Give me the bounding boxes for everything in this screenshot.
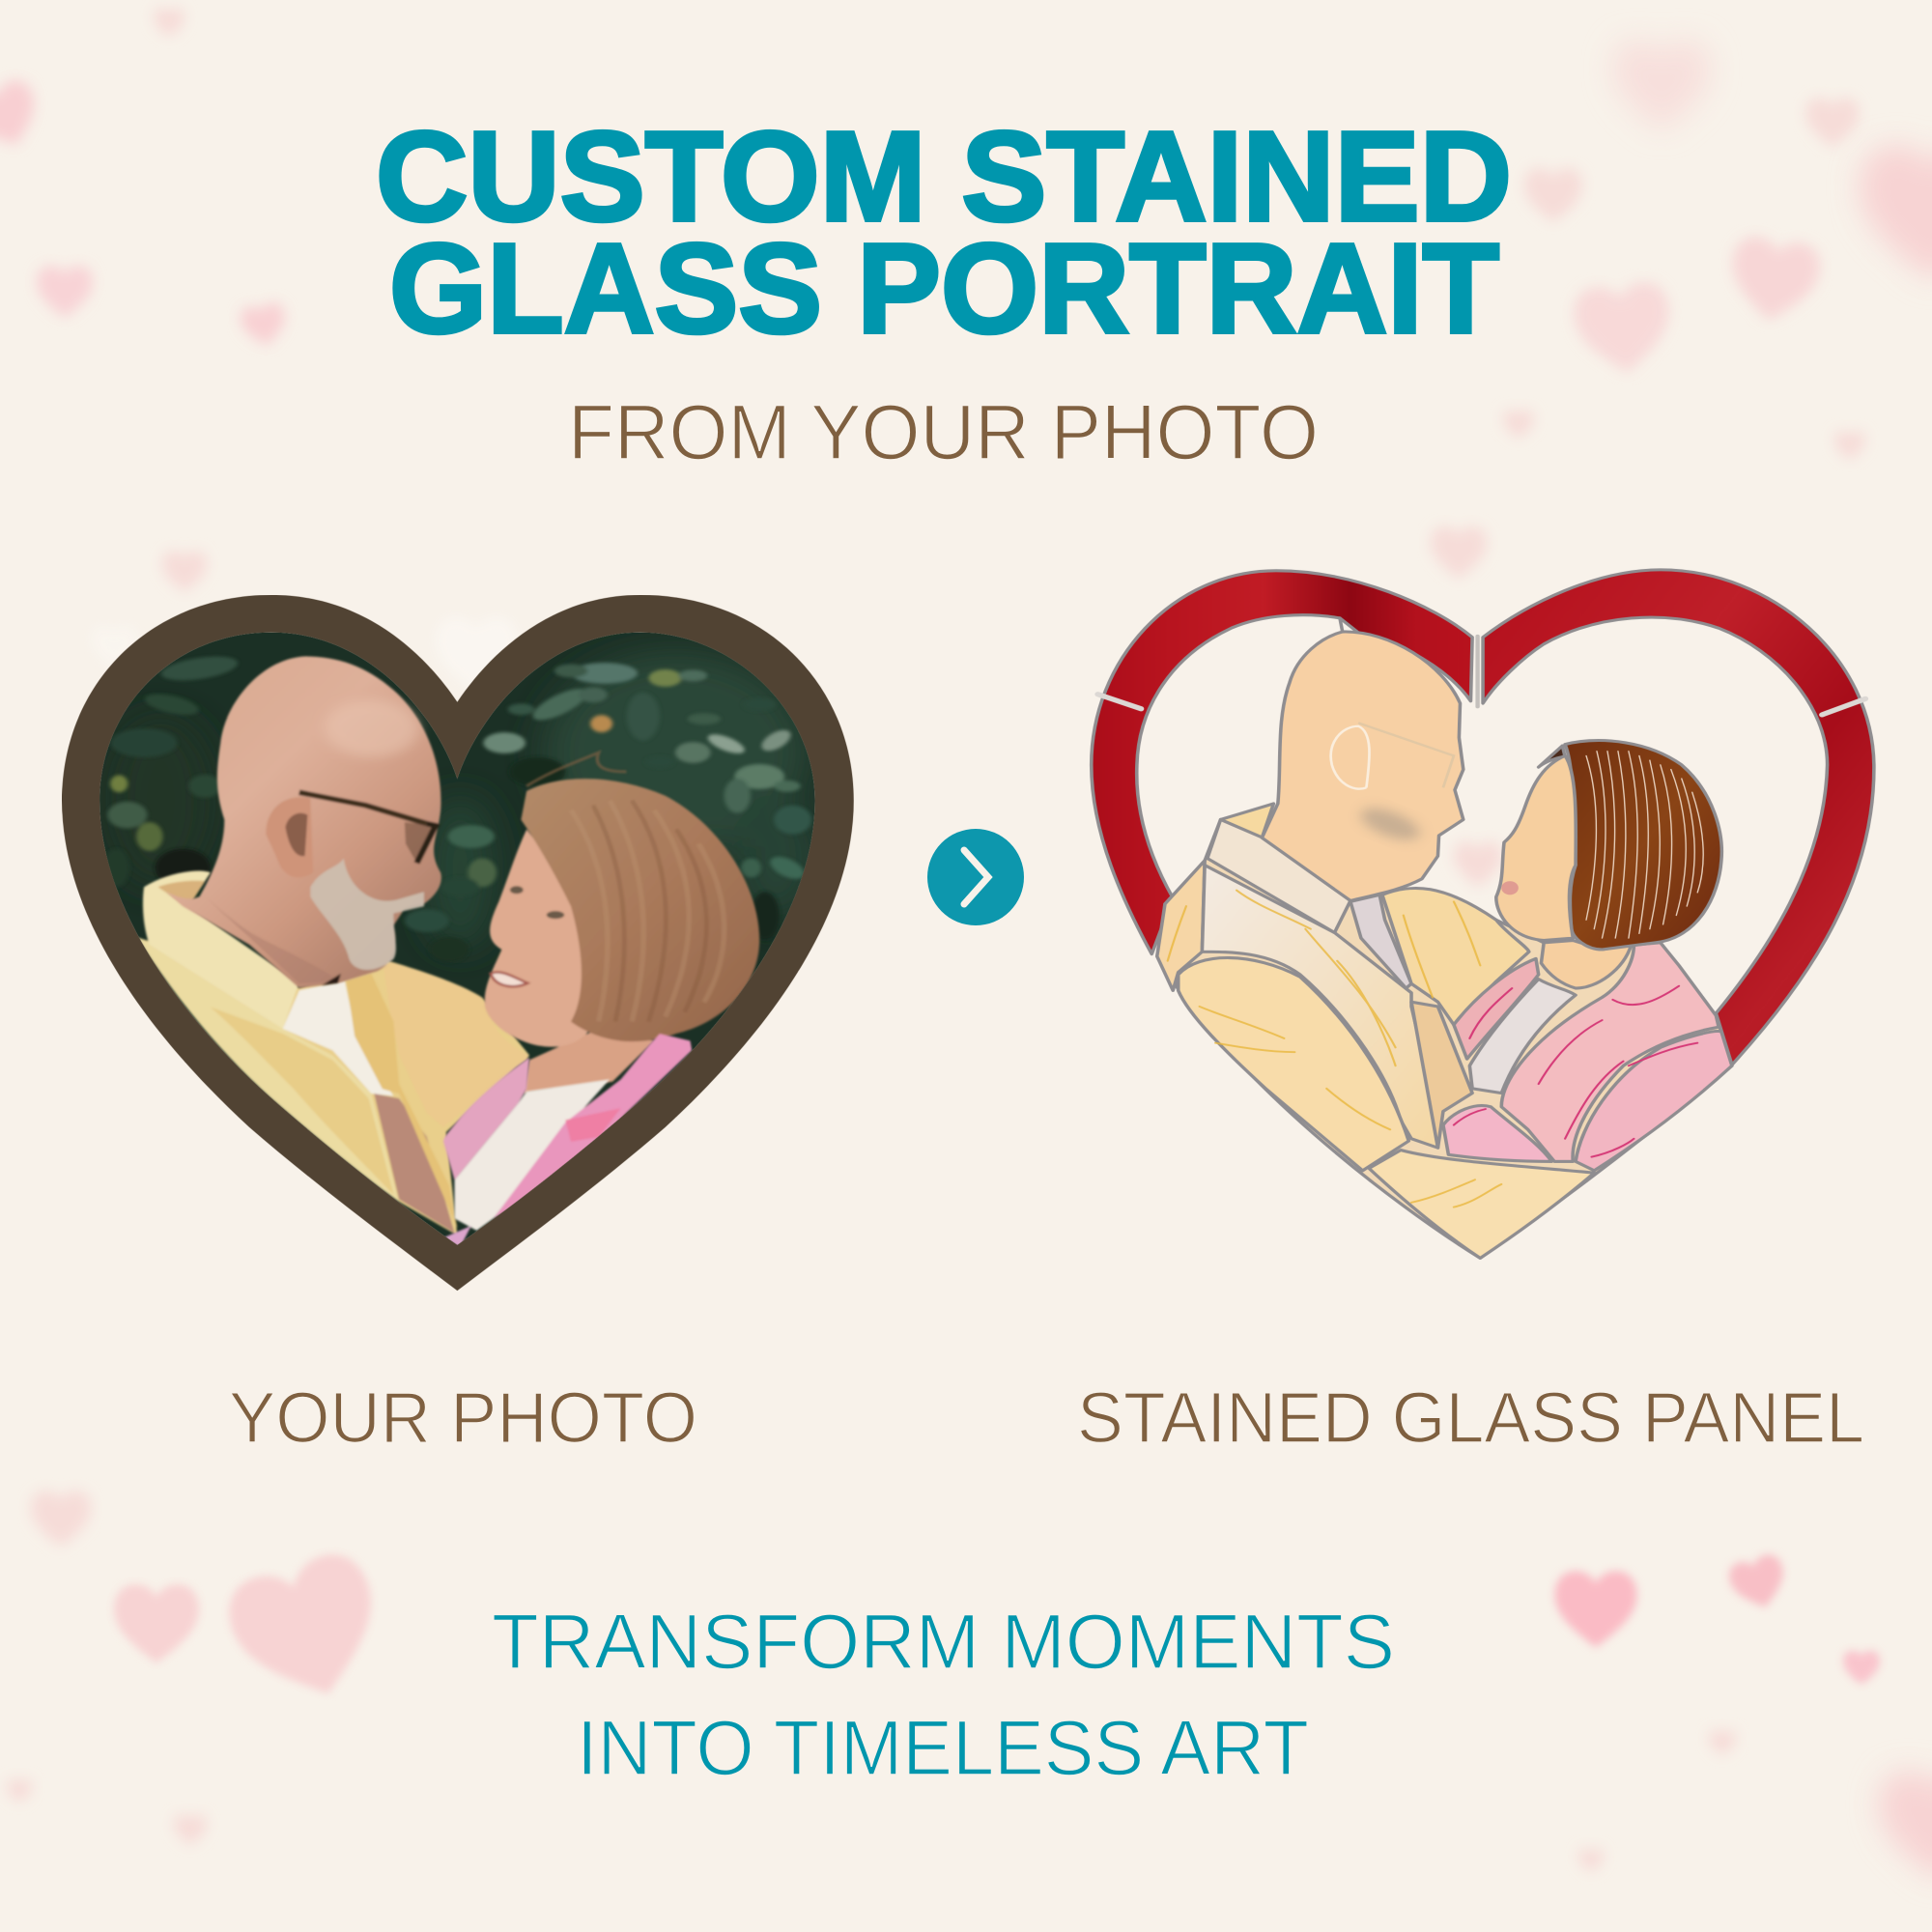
photo foliage background xyxy=(94,628,820,1252)
man glass: head xyxy=(1262,618,1463,900)
tagline xyxy=(492,1599,1395,1792)
label: your photo: YOUR PHOTO xyxy=(229,1378,697,1458)
man: shirt body xyxy=(137,870,529,1236)
red glass ring xyxy=(1092,570,1874,1065)
man glass: shoulders and shirt xyxy=(1157,804,1594,1258)
yellow glass streaks xyxy=(1168,891,1501,1208)
brown heart frame xyxy=(62,595,854,1291)
woman: hair and face xyxy=(485,753,759,1094)
woman glass xyxy=(1443,741,1732,1171)
label: stained glass panel: STAINED GLASS PANEL xyxy=(1077,1378,1864,1458)
subtitle: FROM YOUR PHOTO xyxy=(568,389,1319,476)
man: head xyxy=(166,656,441,988)
panel: your photo heart xyxy=(62,595,854,1291)
tagline: TRANSFORM MOMENTS xyxy=(492,1599,1395,1686)
woman details: lips, hair lines, jacket streaks xyxy=(1454,752,1703,1157)
title: GLASS PORTRAIT xyxy=(389,217,1499,359)
arrow button xyxy=(927,829,1024,925)
figures base glass xyxy=(1160,819,1732,1258)
woman: clothing xyxy=(443,1034,692,1247)
tagline: INTO TIMELESS ART xyxy=(577,1705,1309,1792)
title xyxy=(376,105,1512,359)
panel: stained glass heart xyxy=(1092,570,1874,1258)
title: CUSTOM STAINED xyxy=(376,105,1512,247)
